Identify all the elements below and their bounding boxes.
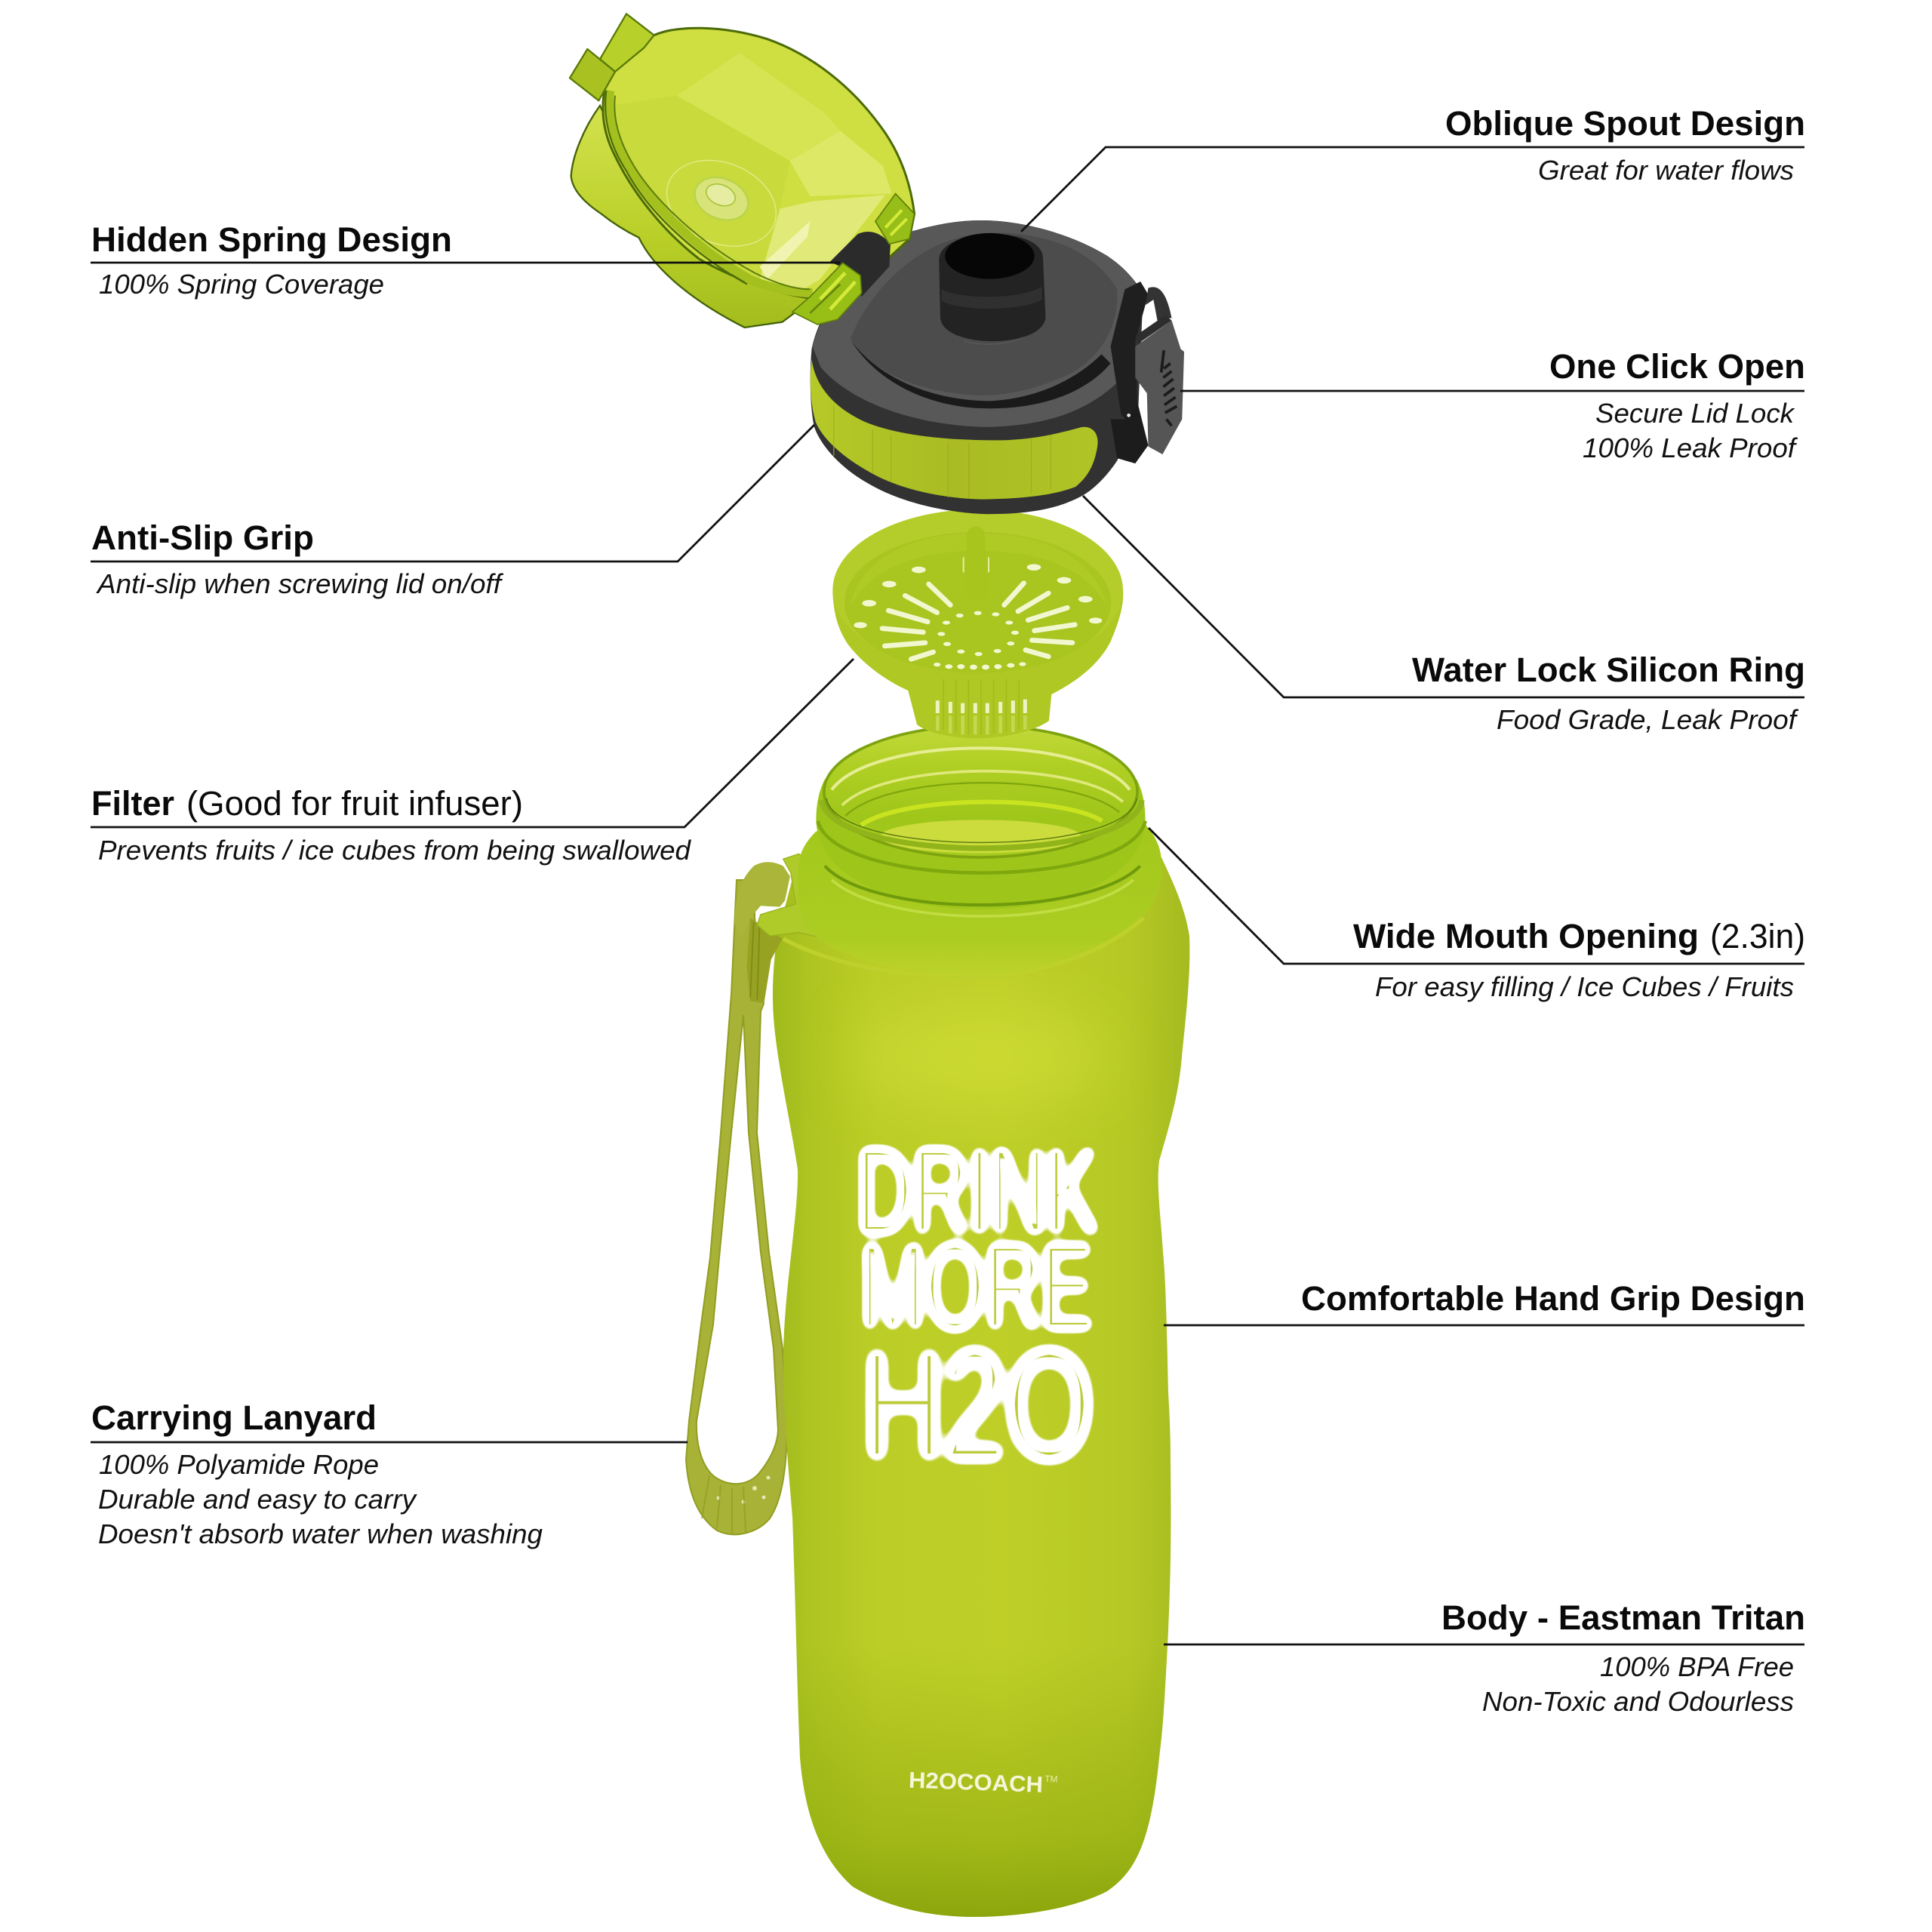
description line 1: Secure Lid Lock [1595,398,1795,429]
description line 2: 100% Leak Proof [1583,432,1798,463]
heading: Carrying Lanyard [91,1398,377,1437]
heading: Hidden Spring Design [91,220,452,259]
description: 100% Spring Coverage [99,269,384,300]
cap silhouette [811,220,1143,514]
mouth interior [821,725,1142,857]
callout: Anti-Slip Grip [91,425,814,599]
callout: One Click Open [1180,347,1805,463]
leader line [91,262,840,263]
heading: Water Lock Silicon Ring [1412,651,1805,689]
lid pull tabs [570,14,654,100]
filter [832,509,1123,738]
description line 2: Durable and easy to carry [98,1484,418,1515]
heading note: (Good for fruit infuser) [186,784,523,823]
lower hinge [792,263,862,325]
lid button [654,145,789,262]
callout: Carrying Lanyard [91,1398,688,1549]
transparent flip lid [570,14,915,328]
leader line [1149,828,1804,964]
heading: Anti-Slip Grip [91,518,314,557]
collar [798,824,1161,975]
illustration: water bottle with parts [570,14,1189,1917]
label: DRINK MORE: MORE [860,1219,1093,1354]
bottle body [773,856,1189,1917]
description line 2: Non-Toxic and Odourless [1482,1686,1794,1717]
label: H2O: H2O [863,1318,1093,1491]
heading: Oblique Spout Design [1445,104,1805,143]
callout: Filter [91,659,854,866]
heading: One Click Open [1549,347,1805,386]
brand logo: TM [1044,1774,1058,1785]
strap tab [757,854,853,940]
leader line [1164,1324,1804,1326]
filter bowl [832,509,1123,670]
description line 3: Doesn't absorb water when washing [98,1518,543,1549]
lid face [603,28,915,300]
heading: Body - Eastman Tritan [1441,1598,1805,1637]
callout: Hidden Spring Design [91,220,840,300]
heading note: (2.3in) [1710,917,1805,955]
callout: Wide Mouth Opening [1149,828,1805,1002]
filter handle [967,526,989,601]
lid facets [611,53,892,293]
leader line [91,425,814,561]
label: DRINK MORE: DRINK [857,1123,1098,1258]
leader line [1083,496,1804,697]
upper hinge [875,194,915,244]
leader line [1180,390,1804,392]
description: Food Grade, Leak Proof [1497,704,1799,735]
filter skirt and stem [832,513,1123,738]
leader line [1164,1644,1804,1645]
filter slots [882,583,1075,659]
brand logo: H2OCOACH [908,1768,1044,1798]
lid rim [605,91,813,293]
heading: Filter [91,784,174,823]
description line 1: 100% BPA Free [1600,1651,1794,1682]
filter holes [854,564,1102,669]
callout: Oblique Spout Design [1021,104,1805,232]
leader line [1021,147,1804,232]
description: For easy filling / Ice Cubes / Fruits [1375,971,1794,1002]
grip band [811,359,1098,500]
label: DRINK MORE [857,1123,1098,1354]
screw cap base [811,220,1184,514]
leader line [91,1441,688,1443]
lid back shell [571,106,813,328]
heading: Comfortable Hand Grip Design [1301,1279,1805,1318]
description: Anti-slip when screwing lid on/off [96,568,504,599]
description line 1: 100% Polyamide Rope [99,1449,379,1480]
callout: Body - Eastman Tritan [1164,1598,1805,1717]
heading: Wide Mouth Opening [1353,917,1699,955]
description: Great for water flows [1538,155,1794,186]
leader line [91,659,854,827]
raised disc [851,233,1117,395]
bottle neck and collar [734,725,1161,1003]
cap top surface [813,220,1138,427]
callout: Water Lock Silicon Ring [1083,496,1805,735]
strap fold [734,862,790,1003]
lanyard [686,880,787,1534]
lock latch [1111,281,1184,463]
hinge axle [830,232,891,297]
neck threads [816,780,1146,916]
filter stem slits [937,700,1025,713]
description: Prevents fruits / ice cubes from being swallowed [98,835,692,866]
spout [939,234,1045,341]
